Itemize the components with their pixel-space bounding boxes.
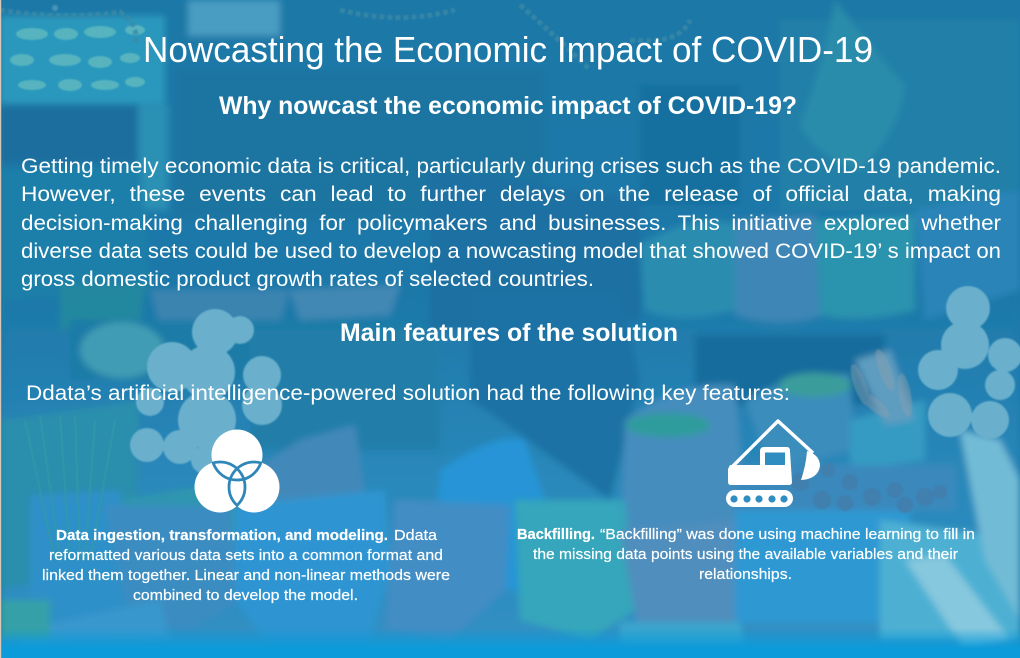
bottom fade band [0, 628, 1020, 658]
text block: backfilling feature: Backfilling. [517, 526, 595, 543]
icon: three overlapping circles [194, 430, 280, 512]
text block: data ingestion feature: Data ingestion, transformation, and modeling. [56, 527, 388, 544]
text block: introduction paragraph: diverse data sets could be used to develop a nowcasting model that showed COVID-19’ s impact on [21, 240, 1001, 263]
text block: data ingestion feature: Ddata [394, 527, 438, 544]
text block: backfilling feature: “Backfilling” was done using machine learning to fill in [600, 526, 975, 543]
heading: why nowcast: Why nowcast the economic impact of COVID-19? [219, 92, 797, 120]
text block: data ingestion feature: combined to develop the model. [133, 587, 358, 604]
text block: backfilling feature: relationships. [699, 566, 792, 583]
icon: excavator [726, 421, 820, 507]
heading: main features: Main features of the solution [340, 319, 678, 347]
text block: introduction paragraph: However, these events can lead to further delays on the release of official data, making [21, 183, 1001, 206]
text block: introduction paragraph: gross domestic product growth rates of selected countries. [21, 268, 594, 291]
title: Nowcasting the Economic Impact of COVID-19 [143, 29, 873, 70]
text block: key features intro: Ddata’s artificial intelligence-powered solution had the following key features: [26, 382, 790, 405]
text block: backfilling feature [517, 526, 975, 583]
text block: introduction paragraph: Getting timely economic data is critical, particularly during crises such as the COVID-19 pandemic. [21, 155, 1001, 178]
text block: data ingestion feature: linked them together. Linear and non-linear methods were [42, 567, 450, 584]
text block: introduction paragraph: decision-making challenging for policymakers and businesses. This initiative explored whether [21, 212, 1001, 235]
text block: data ingestion feature: reformatted various data sets into a common format and [49, 547, 443, 564]
text block: backfilling feature: the missing data points using the available variables and their [533, 546, 958, 563]
text block: introduction paragraph [21, 155, 1001, 291]
text block: data ingestion feature [42, 527, 450, 604]
